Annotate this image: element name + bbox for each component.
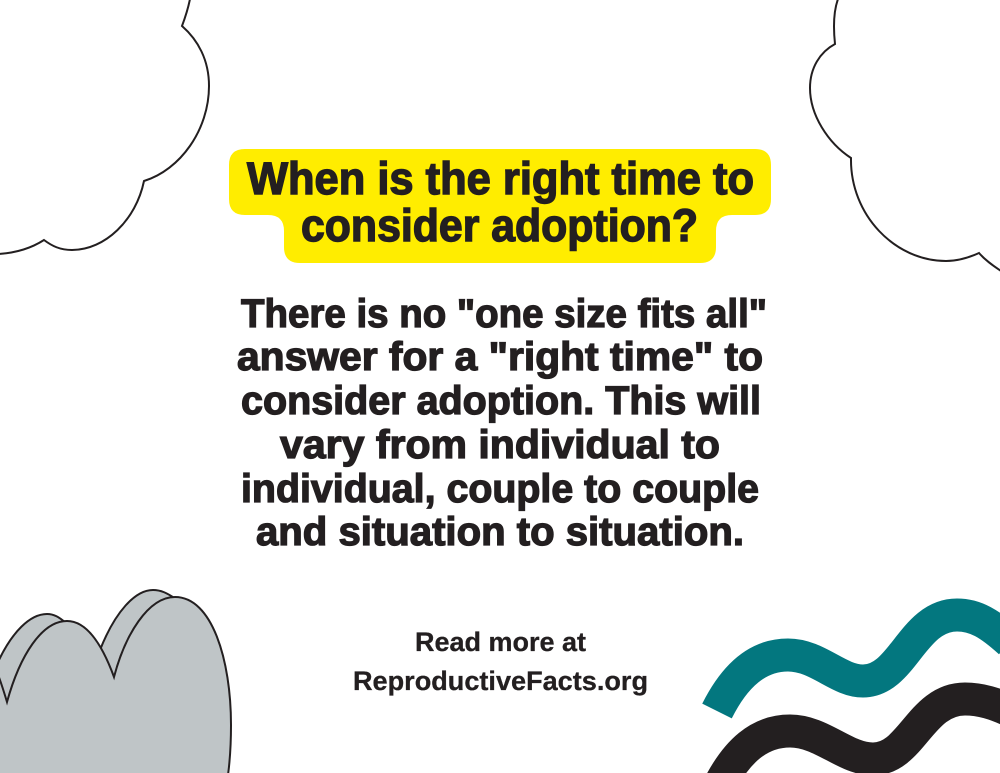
black wave — [716, 699, 1000, 773]
body paragraph: answer for a "right time" to — [237, 335, 763, 379]
title highlight shape — [229, 149, 771, 263]
title block — [229, 149, 771, 263]
footer link text: ReproductiveFacts.org — [353, 666, 648, 696]
grey cloud: bottom left — [0, 590, 231, 773]
teal wave — [717, 615, 1000, 711]
cloud outline: top left — [0, 0, 209, 254]
body paragraph: There is no "one size fits all" — [241, 292, 767, 336]
cloud outline: top right — [810, 0, 1000, 271]
body paragraph: consider adoption. This will — [241, 379, 761, 423]
body paragraph: and situation to situation. — [256, 510, 744, 554]
body paragraph: vary from individual to — [280, 423, 720, 467]
title text: When is the right time to — [247, 153, 754, 204]
footer link text: Read more at — [415, 627, 586, 657]
title text: consider adoption? — [301, 200, 698, 251]
body paragraph: individual, couple to couple — [241, 467, 759, 511]
